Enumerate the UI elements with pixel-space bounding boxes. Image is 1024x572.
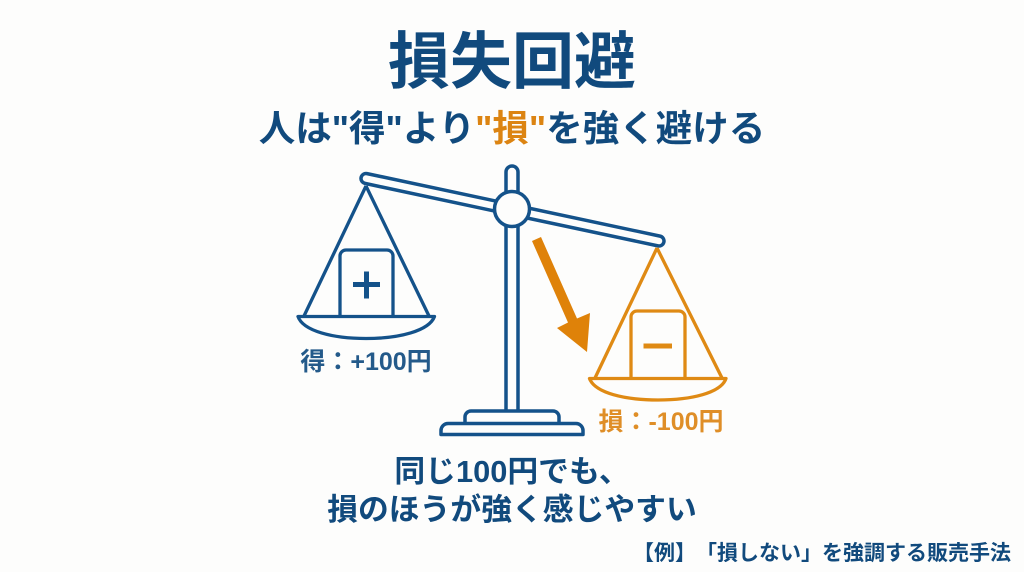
arrow: downward tilt: [532, 237, 590, 352]
footnote: 【例】「損しない」を強調する販売手法: [633, 542, 1011, 565]
left pan: gain: [298, 186, 434, 338]
title: 損失回避: [388, 28, 636, 97]
scale beam: [366, 178, 659, 241]
icon: minus: [644, 344, 672, 348]
loss label: 損：-100円: [598, 408, 724, 436]
conclusion text: 同じ100円でも、: [394, 454, 630, 489]
gain label: 得：+100円: [300, 348, 432, 376]
subtitle: 人は"得"より"損"を強く避ける: [259, 108, 765, 149]
conclusion text: 損のほうが強く感じやすい: [327, 492, 697, 526]
right pan: loss: [590, 248, 726, 400]
icon: plus: [353, 272, 380, 298]
scale stand: [441, 166, 583, 434]
conclusion text: [327, 454, 697, 526]
